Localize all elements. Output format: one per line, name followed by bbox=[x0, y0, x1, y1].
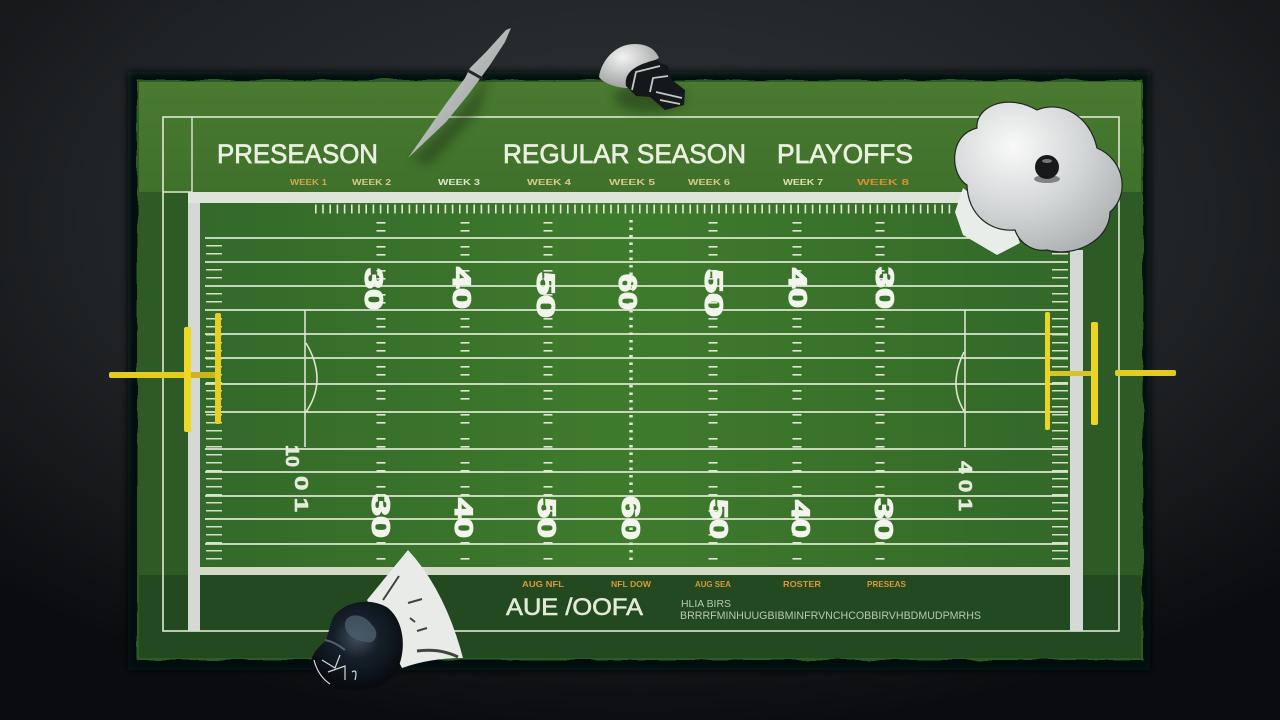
top ruler ticks bbox=[315, 204, 955, 214]
yard numbers lower row: 60 bbox=[616, 496, 644, 540]
yard numbers upper row: 60 bbox=[613, 274, 641, 310]
bottom strip labels: AUG NFL bbox=[522, 579, 564, 589]
yard numbers lower row: 50 bbox=[532, 498, 560, 538]
end zone stray numbers bbox=[282, 445, 975, 512]
outer boundary lines bbox=[163, 117, 1119, 631]
heading: PRESEASON: PRESEASON bbox=[217, 139, 378, 169]
playing field turf bbox=[200, 203, 1070, 567]
yard lines bbox=[205, 238, 1068, 544]
sideline hash ticks bbox=[214, 245, 1060, 566]
thick white sidelines bbox=[188, 192, 1083, 631]
icon: white flower-shaped whistle cap bbox=[955, 102, 1122, 255]
yard numbers upper row: 40 bbox=[783, 268, 811, 308]
yard numbers lower row: 30 bbox=[366, 494, 394, 538]
center hash columns bbox=[381, 222, 880, 564]
icon: dark helmet bbox=[311, 602, 403, 690]
yard numbers lower row: 30 bbox=[869, 498, 897, 540]
bottom caption: HLIA BIRS bbox=[681, 599, 731, 610]
week labels row: WEEK 2 bbox=[352, 177, 391, 187]
bottom title: AUE /OOFA bbox=[506, 594, 643, 621]
icon: small white helmet bbox=[599, 44, 686, 112]
week labels row bbox=[290, 177, 909, 187]
yard numbers upper row: 50 bbox=[531, 272, 559, 318]
end zone stray numbers: 4 0 1 bbox=[955, 461, 975, 511]
yard numbers lower row bbox=[366, 494, 897, 540]
heading: REGULAR SEASON: REGULAR SEASON bbox=[503, 139, 746, 169]
week labels row: WEEK 7 bbox=[783, 177, 823, 187]
yard numbers lower row: 40 bbox=[449, 498, 477, 538]
icon: white pennant bbox=[367, 550, 463, 668]
week labels row: WEEK 4 bbox=[527, 177, 571, 187]
yard numbers upper row: 50 bbox=[699, 269, 727, 317]
week labels row: WEEK 6 bbox=[688, 177, 730, 187]
yard numbers upper row bbox=[359, 267, 898, 318]
yard numbers upper row: 40 bbox=[447, 267, 475, 309]
yard numbers lower row: 40 bbox=[786, 500, 814, 538]
end zone lines and arcs bbox=[305, 310, 965, 447]
end zone stray numbers: 10 bbox=[282, 445, 302, 467]
bottom caption bbox=[680, 599, 981, 622]
bottom caption: BRRRFMINHUUGBIBMINFRVNCHCOBBIRVHBDMUDPMRHS bbox=[680, 610, 981, 622]
heading: PLAYOFFS: PLAYOFFS bbox=[777, 139, 913, 169]
week labels row: WEEK 3 bbox=[438, 177, 480, 187]
bottom strip labels: PRESEAS bbox=[867, 579, 906, 589]
midfield dotted line bbox=[629, 220, 633, 564]
icon: pen bbox=[408, 28, 511, 165]
week labels row: WEEK 1 bbox=[290, 177, 327, 187]
panel: field board bbox=[128, 72, 1150, 670]
yard numbers lower row: 50 bbox=[704, 499, 732, 539]
bottom strip labels: AUG SEA bbox=[695, 579, 731, 589]
bottom strip labels: ROSTER bbox=[783, 579, 821, 589]
week labels row: WEEK 5 bbox=[609, 177, 655, 187]
bottom strip labels: NFL DOW bbox=[611, 579, 652, 589]
week labels row: WEEK 8 bbox=[857, 177, 909, 187]
icon: right goal post bbox=[1045, 312, 1176, 430]
yard numbers upper row: 30 bbox=[870, 267, 898, 309]
end zone stray numbers: 0 1 bbox=[291, 476, 311, 512]
yard numbers upper row: 30 bbox=[359, 268, 387, 310]
icon: left goal post bbox=[109, 313, 221, 432]
bottom strip labels bbox=[522, 579, 906, 589]
